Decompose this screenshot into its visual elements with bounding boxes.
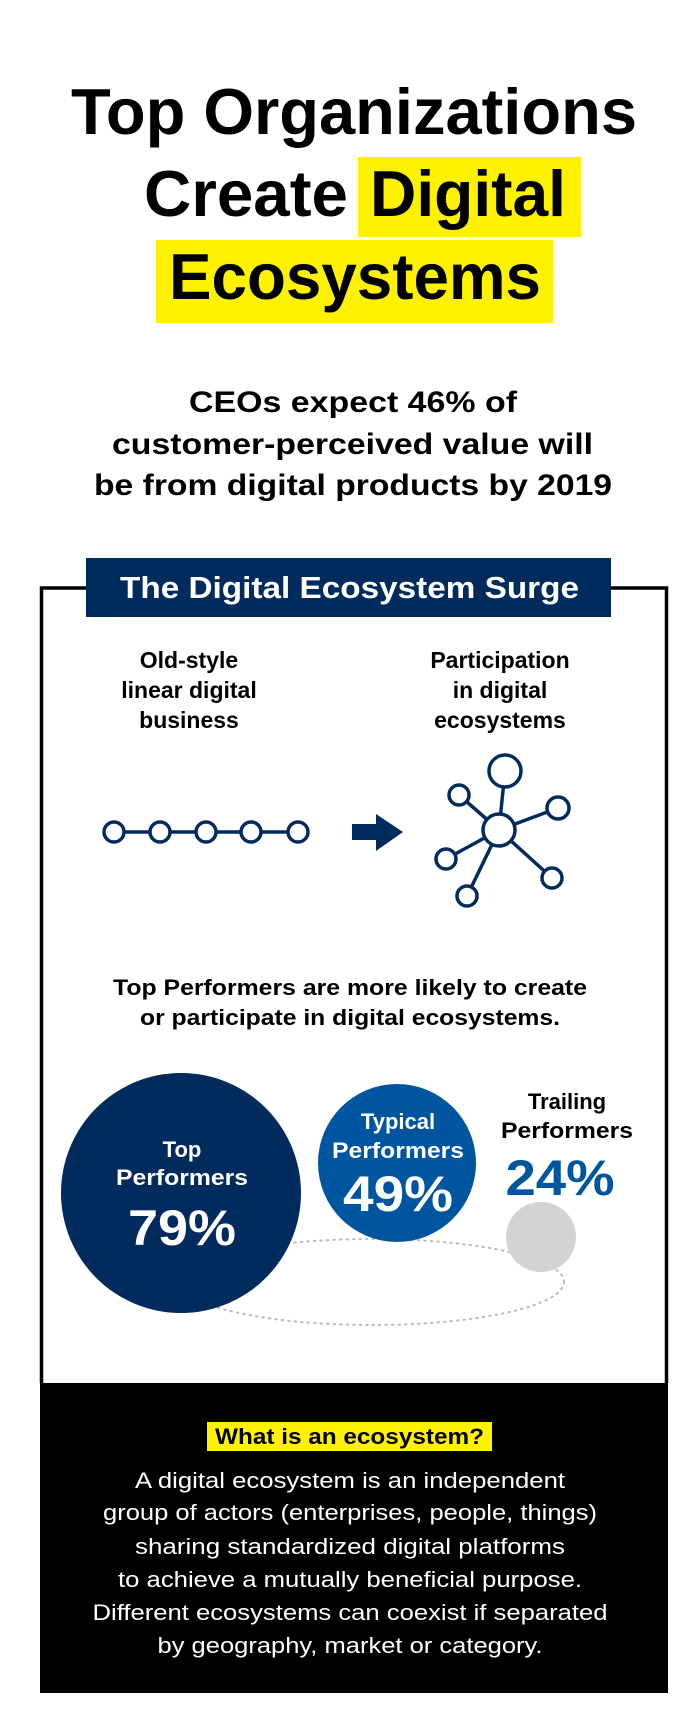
text: ecosystem definition: sharing standardized digital platforms (135, 1534, 565, 1559)
bubble: top performers 79% (61, 1073, 301, 1313)
text: ecosystem definition (92, 1468, 608, 1658)
bubble: typical performers 49%: Typical (361, 1109, 435, 1134)
text: ecosystem definition: group of actors (enterprises, people, things) (103, 1500, 597, 1525)
text: top performers statement: or participate in digital ecosystems. (140, 1005, 560, 1030)
title: Digital (370, 157, 566, 230)
panel: digital ecosystem surge frame (42, 588, 666, 1383)
label: old-style linear digital business: business (139, 707, 239, 733)
arrow (352, 814, 403, 851)
icon: ecosystem network (436, 755, 569, 906)
dotted orbit (180, 1239, 564, 1325)
bubble: typical performers 49% (318, 1084, 476, 1242)
label: participation in digital ecosystems (430, 647, 570, 733)
subtitle: customer-perceived value will (112, 428, 593, 461)
subtitle: CEOs expect 46% of (189, 386, 518, 419)
icon: linear chain (104, 822, 308, 842)
subtitle (94, 386, 612, 502)
bubble: trailing performers 24% (501, 1089, 633, 1272)
text: ecosystem definition: by geography, market or category. (158, 1633, 542, 1658)
subtitle: be from digital products by 2019 (94, 469, 612, 502)
panel heading: The Digital Ecosystem Surge (86, 558, 611, 617)
title: Ecosystems (169, 240, 541, 313)
title: Create (144, 157, 348, 230)
text: ecosystem definition: A digital ecosystem is an independent (135, 1468, 565, 1493)
panel heading: The Digital Ecosystem Surge: The Digital Ecosystem Surge (120, 570, 579, 605)
label: what is an ecosystem: What is an ecosystem? (215, 1424, 484, 1449)
label: participation in digital ecosystems: Participation (430, 647, 570, 673)
panel: what is an ecosystem (40, 1383, 668, 1693)
bubble: trailing performers 24%: Trailing (528, 1089, 606, 1114)
bubble: typical performers 49%: Performers (332, 1138, 464, 1163)
bubble: top performers 79%: Performers (116, 1165, 248, 1190)
label: old-style linear digital business (121, 647, 257, 733)
label: old-style linear digital business: linear digital (121, 677, 257, 703)
title (71, 75, 637, 323)
label: participation in digital ecosystems: ecosystems (434, 707, 566, 733)
title: Top Organizations (71, 75, 637, 148)
text: ecosystem definition: to achieve a mutually beneficial purpose. (118, 1567, 582, 1592)
bubble: trailing performers 24%: Performers (501, 1118, 633, 1143)
text: ecosystem definition: Different ecosystems can coexist if separated (92, 1600, 608, 1625)
bubble: trailing performers 24%: 24% (506, 1150, 614, 1206)
bubble: top performers 79%: Top (163, 1137, 201, 1162)
label: old-style linear digital business: Old-style (140, 647, 238, 673)
label: participation in digital ecosystems: in digital (453, 677, 547, 703)
text: top performers statement: Top Performers are more likely to create (113, 975, 587, 1000)
text: top performers statement (113, 975, 587, 1030)
bubble: top performers 79%: 79% (128, 1200, 236, 1256)
bubble: typical performers 49%: 49% (343, 1166, 453, 1222)
